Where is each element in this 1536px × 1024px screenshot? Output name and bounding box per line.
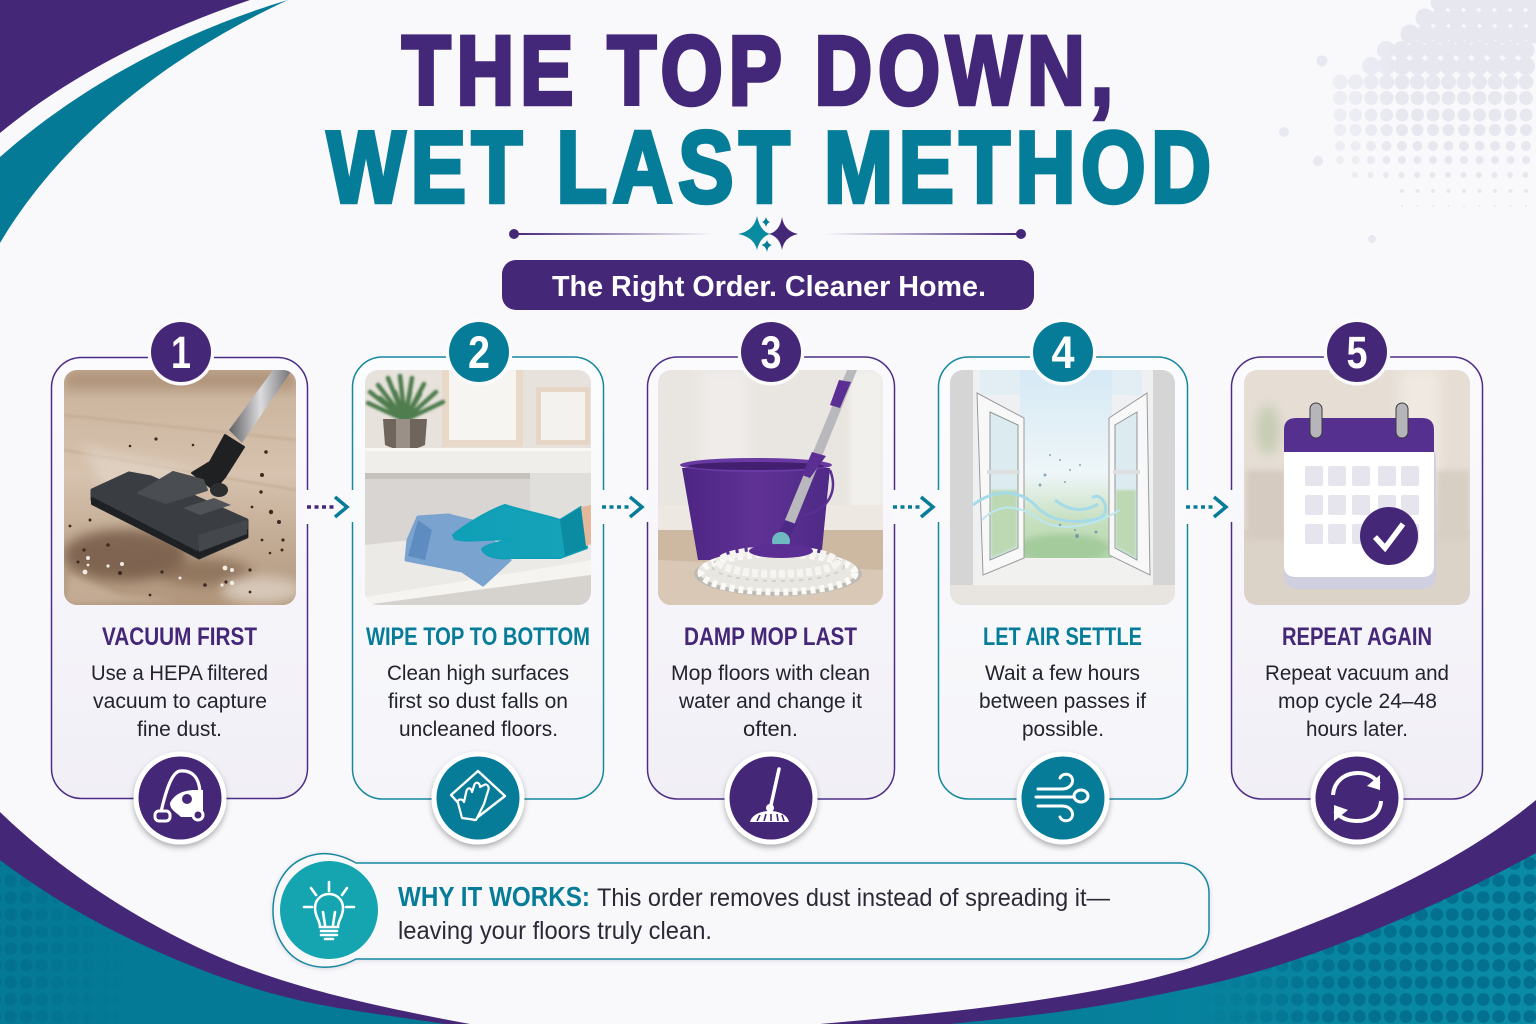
bottom-left halftone bbox=[0, 860, 58, 1022]
calendar header bbox=[1284, 418, 1434, 452]
arrow 3 to 4 bbox=[891, 490, 941, 524]
calendar grid bbox=[1305, 466, 1419, 544]
bucket bbox=[682, 468, 830, 560]
photo: calendar with check bbox=[1244, 370, 1470, 605]
wrist bbox=[581, 505, 591, 546]
arrow 2 to 3 bbox=[600, 490, 650, 524]
card 1 description: Use a HEPA filtered bbox=[91, 661, 268, 685]
card 1 number badge bbox=[148, 318, 214, 386]
dust particles bbox=[1038, 454, 1098, 538]
card 3 heading: DAMP MOP LAST bbox=[684, 623, 857, 651]
card 5 number badge bbox=[1324, 318, 1390, 386]
card 4 icon: wind bbox=[1016, 752, 1110, 844]
card 1 number badge: 1 bbox=[171, 327, 191, 378]
card 4 number badge: 4 bbox=[1052, 327, 1074, 378]
bottom-left teal wave bbox=[0, 860, 445, 1024]
card 2 description: uncleaned floors. bbox=[399, 717, 558, 741]
bottom-right teal wave bbox=[950, 853, 1536, 1024]
card 3 description: Mop floors with clean bbox=[671, 661, 870, 685]
vacuum joint bbox=[192, 435, 244, 490]
callout text: This order removes dust instead of spreading it— bbox=[597, 884, 1110, 912]
mop head bbox=[694, 566, 862, 596]
wind swirl bbox=[973, 493, 1105, 522]
left window leaf bbox=[977, 393, 1024, 575]
photo: vacuum on dusty floor bbox=[63, 370, 302, 605]
card 2: wipe top to bottom bbox=[352, 318, 604, 844]
card 2 icon: cloth and glove bbox=[432, 752, 524, 844]
card 4 frame bbox=[938, 357, 1188, 799]
card 1 frame bbox=[52, 358, 308, 798]
card 3 description: often. bbox=[743, 717, 798, 741]
divider with sparkles bbox=[509, 216, 1026, 252]
bottom-left purple wave bbox=[0, 812, 470, 1024]
why it works callout bbox=[273, 854, 1209, 967]
right window leaf bbox=[1109, 393, 1150, 575]
card 4 description bbox=[979, 661, 1146, 741]
callout text bbox=[398, 881, 1110, 945]
icon: lightbulb bbox=[280, 861, 378, 959]
card 1: vacuum first bbox=[52, 318, 308, 844]
title bbox=[327, 17, 1211, 224]
frames on shelf bbox=[442, 370, 523, 447]
arrow 4 to 5 bbox=[1184, 490, 1234, 524]
stray halftone dots bbox=[1279, 56, 1376, 243]
top-left purple swoosh bbox=[0, 0, 250, 133]
card 3 frame bbox=[648, 357, 894, 799]
card 3: damp mop last bbox=[648, 318, 894, 844]
card 1 description: fine dust. bbox=[137, 717, 222, 741]
callout box bbox=[273, 854, 1209, 967]
vacuum head bbox=[92, 473, 247, 558]
card 4: let air settle bbox=[938, 318, 1188, 844]
check badge bbox=[1360, 507, 1418, 565]
title line 2: WET LAST METHOD bbox=[327, 110, 1211, 224]
card 4 description: Wait a few hours bbox=[985, 661, 1140, 685]
card 2 heading: WIPE TOP TO BOTTOM bbox=[366, 623, 590, 651]
card 1 description: vacuum to capture bbox=[93, 689, 267, 713]
card 5 description: mop cycle 24–48 bbox=[1278, 689, 1437, 713]
card 5: repeat again bbox=[1232, 318, 1482, 844]
card 3 number badge bbox=[738, 318, 804, 386]
card 5 icon: refresh bbox=[1310, 752, 1404, 844]
card 4 heading: LET AIR SETTLE bbox=[983, 623, 1142, 651]
card 5 description: hours later. bbox=[1306, 717, 1408, 741]
card 1 icon: vacuum bbox=[134, 752, 226, 844]
card 2 number badge bbox=[446, 318, 512, 386]
subtitle pill bbox=[502, 260, 1034, 310]
card 5 description bbox=[1265, 661, 1449, 741]
card 5 number badge: 5 bbox=[1346, 327, 1368, 378]
card 3 icon: mop bbox=[724, 752, 818, 844]
upper shelf bbox=[365, 451, 591, 473]
title line 1: THE TOP DOWN, bbox=[402, 17, 1113, 125]
card 2 description: Clean high surfaces bbox=[387, 661, 569, 685]
plant bbox=[368, 376, 443, 420]
vacuum tube bbox=[229, 370, 292, 443]
top-left teal swoosh bbox=[0, 0, 288, 243]
calendar pages bbox=[1284, 445, 1436, 589]
card 4 description: possible. bbox=[1022, 717, 1104, 741]
bottom-right halftone bbox=[1248, 857, 1536, 1023]
blue glove bbox=[453, 505, 587, 559]
card 2 description bbox=[387, 661, 569, 741]
floor bbox=[950, 585, 1175, 605]
card 3 description bbox=[671, 661, 870, 741]
card 5 description: Repeat vacuum and bbox=[1265, 661, 1449, 685]
calendar body bbox=[1284, 450, 1434, 577]
card 1 description bbox=[91, 661, 268, 741]
top-right halftone dots bbox=[1340, 2, 1536, 206]
calendar rings bbox=[1310, 403, 1322, 438]
card 3 number badge: 3 bbox=[760, 327, 782, 378]
card 5 heading: REPEAT AGAIN bbox=[1282, 623, 1432, 651]
photo: bucket and mop bbox=[658, 370, 883, 605]
microfiber cloth bbox=[406, 515, 510, 585]
photo: gloved hand wiping shelf bbox=[365, 370, 591, 605]
card 2 number badge: 2 bbox=[468, 327, 490, 378]
card 4 number badge bbox=[1030, 318, 1096, 386]
bottom-right purple wave bbox=[820, 800, 1536, 1024]
mop pole bbox=[784, 370, 857, 524]
card 3 description: water and change it bbox=[678, 689, 862, 713]
card 5 frame bbox=[1232, 357, 1482, 799]
mop plate bbox=[749, 544, 813, 558]
lower shelf bbox=[365, 540, 591, 596]
arrow 1 to 2 bbox=[304, 490, 356, 524]
card 1 heading: VACUUM FIRST bbox=[102, 623, 257, 651]
photo: open window with breeze bbox=[950, 370, 1175, 605]
card 2 description: first so dust falls on bbox=[388, 689, 568, 713]
subtitle pill: The Right Order. Cleaner Home. bbox=[552, 271, 986, 303]
card 4 description: between passes if bbox=[979, 689, 1146, 713]
callout text: leaving your floors truly clean. bbox=[398, 917, 712, 945]
shelf back wall bbox=[365, 473, 591, 605]
card 2 frame bbox=[352, 357, 604, 799]
callout text: WHY IT WORKS: bbox=[398, 881, 590, 912]
